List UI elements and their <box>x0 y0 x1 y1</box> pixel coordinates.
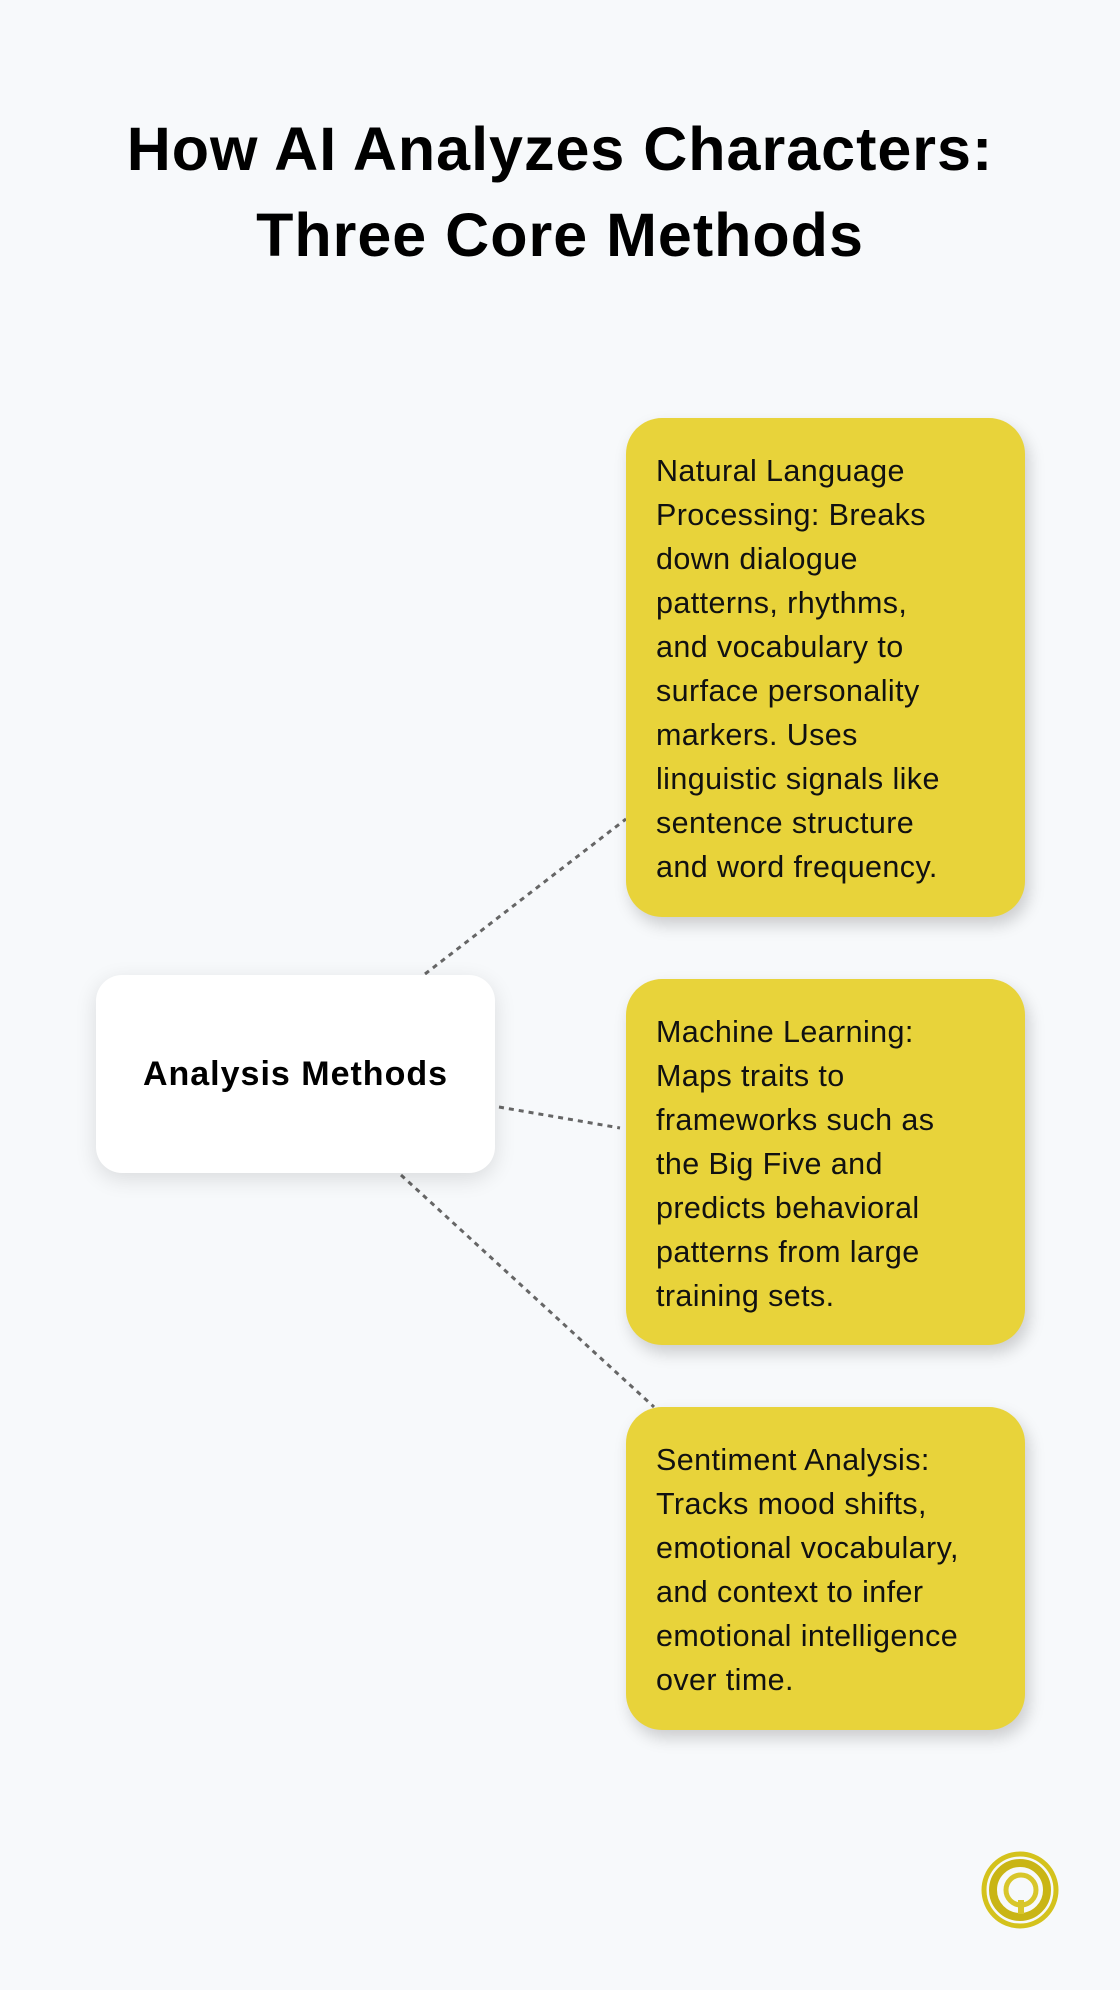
card: Natural Language Processing: down dialogue <box>656 542 858 576</box>
card: Sentiment Analysis <box>626 1407 1025 1730</box>
card: Natural Language Processing: Processing: Breaks <box>656 498 926 532</box>
card: Machine Learning: predicts behavioral <box>656 1191 920 1225</box>
card: Natural Language Processing: surface personality <box>656 674 920 708</box>
title <box>127 115 993 269</box>
card: Sentiment Analysis: Tracks mood shifts, <box>656 1487 927 1521</box>
card: Natural Language Processing: markers. Uses <box>656 718 858 752</box>
card: Sentiment Analysis: Sentiment Analysis: <box>656 1443 930 1477</box>
card: Natural Language Processing: sentence structure <box>656 806 914 840</box>
card: Natural Language Processing: and word frequency. <box>656 850 938 884</box>
card: Machine Learning: the Big Five and <box>656 1147 883 1181</box>
title: How AI Analyzes Characters: <box>127 115 993 183</box>
card: Machine Learning: Machine Learning: <box>656 1015 914 1049</box>
card: Natural Language Processing <box>626 418 1025 917</box>
card: Sentiment Analysis: over time. <box>656 1663 794 1697</box>
card: Natural Language Processing: and vocabulary to <box>656 630 904 664</box>
center node: Analysis Methods: Analysis Methods <box>143 1054 448 1092</box>
card: Sentiment Analysis: and context to infer <box>656 1575 923 1609</box>
card: Natural Language Processing: linguistic signals like <box>656 762 940 796</box>
card: Natural Language Processing: Natural Language <box>656 454 905 488</box>
center node: Analysis Methods <box>96 975 495 1173</box>
card: Machine Learning: frameworks such as <box>656 1103 934 1137</box>
card: Machine Learning: patterns from large <box>656 1235 920 1269</box>
card: Machine Learning: Maps traits to <box>656 1059 845 1093</box>
card: Sentiment Analysis: emotional intelligence <box>656 1619 958 1653</box>
card: Natural Language Processing: patterns, rhythms, <box>656 586 907 620</box>
icon: logo <box>982 1852 1058 1928</box>
card: Sentiment Analysis: emotional vocabulary, <box>656 1531 959 1565</box>
card: Machine Learning <box>626 979 1025 1345</box>
title: Three Core Methods <box>256 201 864 269</box>
card: Machine Learning: training sets. <box>656 1279 835 1313</box>
